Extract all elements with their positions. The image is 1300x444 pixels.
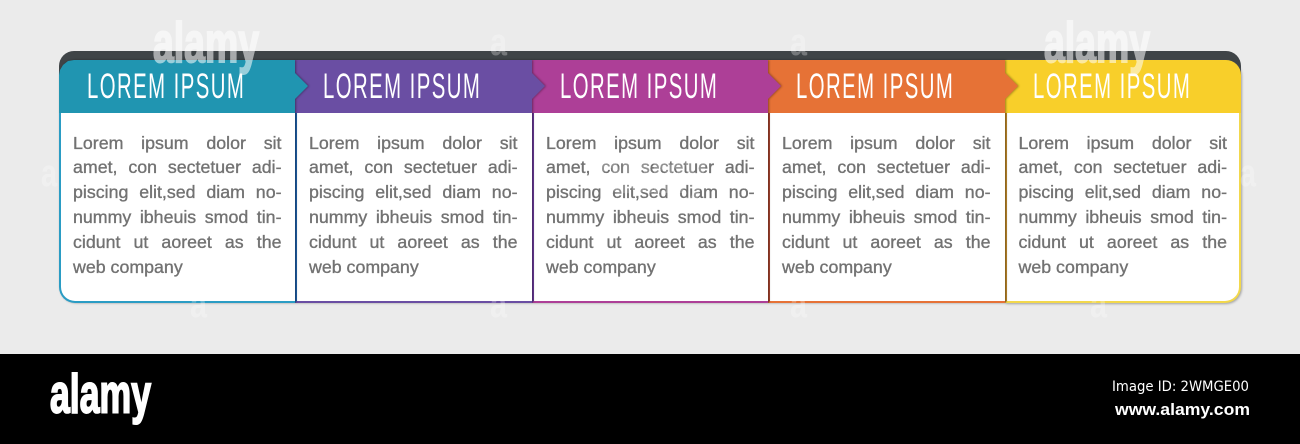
step 4 title: LOREM IPSUM (796, 67, 954, 107)
step 5 body (1005, 112, 1241, 303)
watermarks: a (1240, 153, 1257, 195)
step 5 text: piscing elit,sed diam no- (1018, 182, 1227, 202)
panel: step 3 magenta (532, 60, 783, 304)
step 3 title: LOREM IPSUM (560, 67, 718, 107)
step 3 header with arrow (532, 60, 781, 113)
step 2 text: amet, con sectetuer adi- (309, 157, 518, 177)
step 3 text: cidunt ut aoreet as the (546, 232, 754, 252)
step 2 text: web company (309, 257, 419, 277)
image id: Image ID: 2WMGE00 (1112, 379, 1249, 395)
dark top strip (59, 51, 1241, 91)
panel: step 1 teal (58, 60, 310, 304)
step 1 body (59, 112, 295, 303)
step 4 text: amet, con sectetuer adi- (782, 157, 990, 177)
step 1 header with arrow (59, 60, 308, 113)
step 3 text: nummy ibheuis smod tin- (546, 207, 754, 227)
panel: step 5 yellow (1005, 60, 1244, 306)
watermarks: a (490, 22, 508, 64)
watermarks: alamy (153, 11, 259, 75)
step 5 text: cidunt ut aoreet as the (1018, 232, 1227, 252)
step 1 title: LOREM IPSUM (87, 67, 245, 107)
watermarks: a (490, 284, 508, 326)
step 5 text: amet, con sectetuer adi- (1018, 157, 1227, 177)
step 1 text: nummy ibheuis smod tin- (73, 207, 282, 227)
step 3 text: web company (546, 257, 656, 277)
step 5 title: LOREM IPSUM (1033, 67, 1191, 107)
watermarks (41, 11, 1257, 326)
step 4 header with arrow (768, 60, 1018, 113)
step 1 text: Lorem ipsum dolor sit (73, 133, 282, 153)
step 4 text: cidunt ut aoreet as the (782, 232, 990, 252)
watermarks: alamy (1044, 11, 1150, 75)
step 1 text (72, 133, 282, 277)
step 3 text: amet, con sectetuer adi- (546, 157, 754, 177)
step 5 text: web company (1018, 257, 1128, 277)
step 2 text: piscing elit,sed diam no- (309, 182, 518, 202)
step 3 body (532, 112, 768, 303)
step 3 text: Lorem ipsum dolor sit (546, 133, 754, 153)
footer bar (0, 354, 1300, 444)
watermarks: a (190, 284, 208, 326)
step 2 text (308, 133, 518, 277)
step 4 text: nummy ibheuis smod tin- (782, 207, 990, 227)
step 4 text: piscing elit,sed diam no- (782, 182, 990, 202)
watermarks: a (790, 284, 808, 326)
watermarks: a (790, 22, 808, 64)
step 2 text: cidunt ut aoreet as the (309, 232, 518, 252)
step 5 text: Lorem ipsum dolor sit (1018, 133, 1227, 153)
step 2 text: nummy ibheuis smod tin- (309, 207, 518, 227)
step 4 text: Lorem ipsum dolor sit (782, 133, 990, 153)
step 1 text: web company (73, 257, 183, 277)
panel: step 4 orange (768, 60, 1020, 304)
step 5 text: nummy ibheuis smod tin- (1018, 207, 1227, 227)
step 2 text: Lorem ipsum dolor sit (309, 133, 518, 153)
step 2 header with arrow (295, 60, 545, 113)
watermarks: alamy (600, 141, 706, 205)
step 5 text (1018, 133, 1227, 277)
watermarks: a (41, 153, 58, 195)
step 1 text: cidunt ut aoreet as the (73, 232, 282, 252)
step 1 text: amet, con sectetuer adi- (73, 157, 282, 177)
step 2 body (295, 112, 532, 303)
step 4 text (782, 133, 990, 277)
step 4 body (768, 112, 1005, 303)
step 2 title: LOREM IPSUM (323, 67, 481, 107)
step 5 header (1005, 60, 1241, 113)
alamy logo: alamy (50, 362, 151, 424)
watermarks: a (1090, 284, 1108, 326)
step 3 text: piscing elit,sed diam no- (546, 182, 754, 202)
step 1 text: piscing elit,sed diam no- (73, 182, 282, 202)
step 3 text (546, 133, 754, 277)
website: www.alamy.com (1114, 400, 1250, 419)
panel: step 2 purple (295, 60, 546, 304)
step 4 text: web company (782, 257, 892, 277)
